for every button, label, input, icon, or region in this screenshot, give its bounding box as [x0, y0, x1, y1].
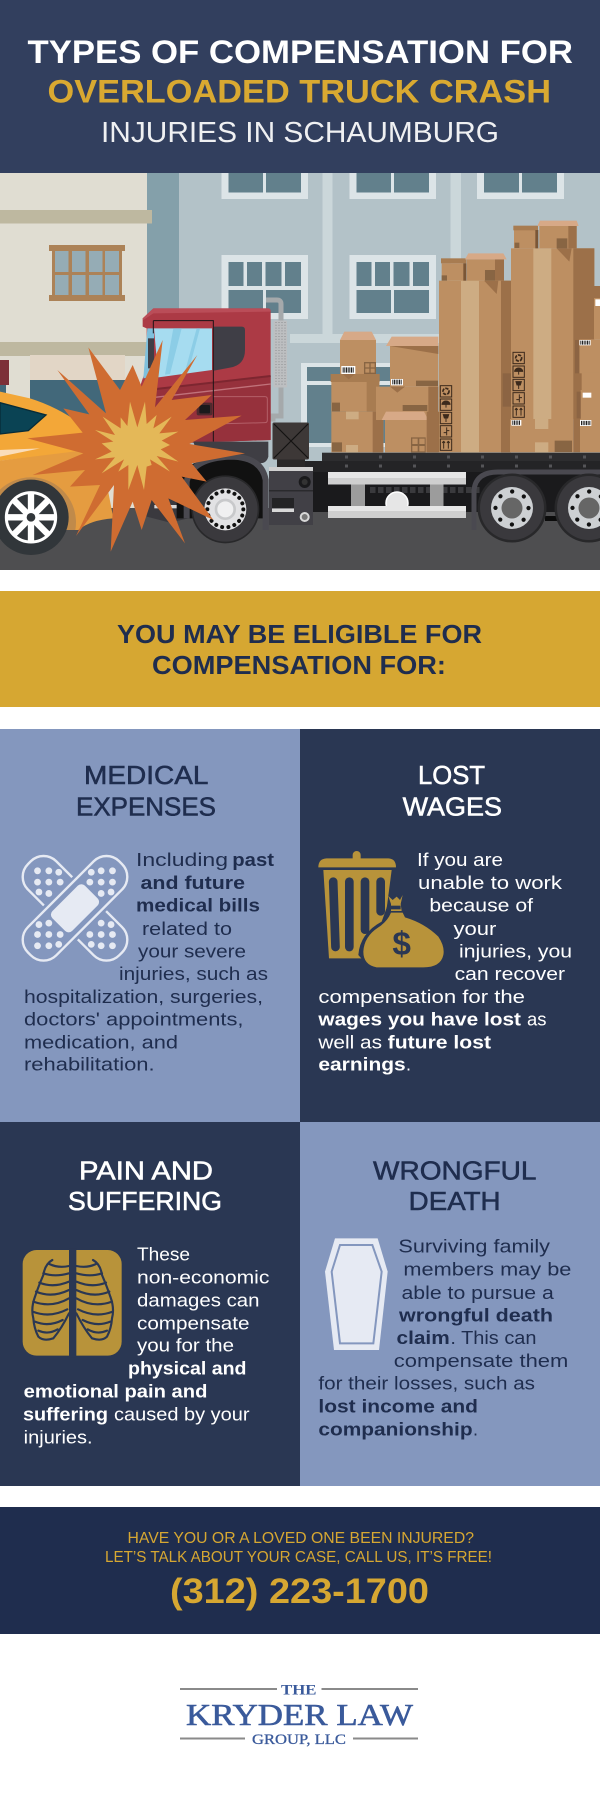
heading: pain and suffering: PAIN AND — [79, 1155, 213, 1185]
truck — [140, 300, 600, 543]
text: lost wages: wages you have lost — [317, 1010, 521, 1030]
background buildings — [147, 173, 600, 508]
text: wrongful death — [318, 1237, 571, 1439]
logo: The Kryder Law Group, LLC: THE — [281, 1682, 316, 1698]
icon: trash can and money bag — [318, 851, 445, 970]
text: lost wages: compensation for the — [318, 987, 525, 1007]
text: wrongful death: members may be — [403, 1260, 571, 1280]
logo: The Kryder Law Group, LLC: GROUP, LLC — [252, 1732, 346, 1748]
icon: crossed bandages — [15, 849, 135, 968]
right edge boxes — [575, 286, 600, 419]
heading: lost wages — [403, 760, 502, 822]
text: medical expenses: medical bills — [136, 896, 260, 916]
car and explosion — [0, 340, 245, 555]
panel: wrongful death — [300, 1122, 600, 1486]
text: medical expenses: past — [232, 850, 274, 870]
text: medical expenses: injuries, such as — [119, 964, 268, 984]
heading: wrongful death — [373, 1155, 536, 1216]
text: wrongful death: . — [473, 1419, 478, 1439]
logo: The Kryder Law Group, LLC — [180, 1682, 418, 1748]
cream building — [0, 173, 152, 513]
eligibility banner: YOU MAY BE ELIGIBLE FOR — [117, 619, 482, 649]
heading: wrongful death: WRONGFUL — [373, 1155, 536, 1185]
title — [28, 34, 573, 149]
crate — [272, 422, 309, 468]
icon: rib cage — [23, 1248, 122, 1357]
cab wheel — [147, 457, 266, 543]
text: wrongful death: for their losses, such as — [318, 1374, 535, 1394]
text: medical expenses: your severe — [138, 941, 246, 961]
text: lost wages: injuries, you — [459, 941, 572, 961]
text: medical expenses: rehabilitation. — [24, 1055, 155, 1075]
text: lost wages: because of — [429, 896, 534, 916]
heading: lost wages: LOST — [418, 760, 485, 790]
call to action: HAVE YOU OR A LOVED ONE BEEN INJURED? — [128, 1530, 474, 1547]
text: wrongful death: . This can — [450, 1328, 536, 1348]
title: TYPES OF COMPENSATION FOR — [28, 34, 573, 70]
flatbed and chassis — [295, 453, 600, 518]
title: OVERLOADED TRUCK CRASH — [48, 74, 551, 110]
text: wrongful death: compensate them — [394, 1351, 568, 1371]
text: pain and suffering: caused by your — [114, 1404, 250, 1424]
heading: medical expenses: EXPENSES — [76, 792, 216, 822]
text: pain and suffering: These — [137, 1245, 190, 1265]
heading: wrongful death: DEATH — [409, 1186, 501, 1216]
text: pain and suffering: physical and — [128, 1359, 246, 1379]
text: lost wages: If you are — [417, 850, 503, 870]
text: pain and suffering: compensate — [137, 1314, 250, 1334]
text: lost wages: as — [527, 1010, 546, 1030]
handling symbols, right column — [513, 352, 524, 417]
text: medical expenses: related to — [142, 919, 232, 939]
text: lost wages: your — [454, 919, 496, 939]
panel: pain and suffering — [0, 1122, 300, 1486]
rear wheels — [474, 472, 600, 542]
text: medical expenses: medication, and — [24, 1033, 178, 1053]
text: pain and suffering: damages can — [137, 1291, 260, 1311]
text: pain and suffering: emotional pain and — [24, 1381, 207, 1401]
cardboard box load — [331, 221, 600, 453]
yellow car — [0, 392, 113, 555]
panel: medical expenses — [0, 729, 300, 1122]
road — [0, 508, 600, 570]
text: medical expenses: and future — [140, 873, 245, 893]
illustration: overloaded truck crash — [0, 173, 600, 570]
logo: The Kryder Law Group, LLC: KRYDER LAW — [186, 1697, 414, 1732]
text: wrongful death: companionship — [318, 1419, 473, 1439]
text: medical expenses: doctors' appointments, — [24, 1010, 244, 1030]
text: medical expenses — [24, 850, 274, 1075]
handling symbols, left column — [440, 386, 452, 450]
battery box — [269, 467, 313, 525]
explosion — [27, 340, 245, 552]
call to action — [0, 1507, 600, 1634]
heading: lost wages: WAGES — [403, 792, 502, 822]
car wheel — [0, 480, 69, 555]
exhaust stack — [263, 300, 287, 419]
text: medical expenses: hospitalization, surgeries, — [24, 987, 263, 1007]
text: wrongful death: lost income and — [318, 1397, 478, 1417]
left stack of boxes — [331, 332, 439, 453]
text: pain and suffering: non-economic — [137, 1268, 269, 1288]
text: pain and suffering: you for the — [137, 1336, 234, 1356]
text: pain and suffering — [23, 1245, 269, 1447]
text: wrongful death: wrongful death — [398, 1306, 553, 1326]
text: lost wages: future lost — [388, 1033, 491, 1053]
eligibility banner: COMPENSATION FOR: — [152, 650, 446, 680]
heading: pain and suffering: SUFFERING — [68, 1186, 222, 1216]
text: lost wages: well as — [317, 1033, 382, 1053]
text: wrongful death: claim — [396, 1328, 450, 1348]
text: wrongful death: Surviving family — [398, 1237, 550, 1257]
text: lost wages: unable to work — [418, 873, 563, 893]
cab and front wheel — [140, 308, 271, 543]
heading: medical expenses — [76, 760, 216, 822]
panel: lost wages — [300, 729, 600, 1122]
tall box two — [510, 221, 600, 452]
truck cab — [140, 308, 271, 463]
call to action: LET’S TALK ABOUT YOUR CASE, CALL US, IT’S FREE! — [105, 1549, 492, 1566]
text: pain and suffering: injuries. — [24, 1427, 93, 1447]
heading: medical expenses: MEDICAL — [84, 760, 208, 790]
text: lost wages: earnings — [318, 1055, 406, 1075]
text: medical expenses: Including — [136, 850, 228, 870]
text: pain and suffering: suffering — [23, 1404, 108, 1424]
tall box one — [439, 253, 511, 452]
heading: pain and suffering — [68, 1155, 222, 1216]
icon: coffin — [325, 1238, 388, 1350]
text: wrongful death: able to pursue a — [402, 1283, 555, 1303]
eligibility banner — [0, 591, 600, 707]
header banner — [0, 0, 600, 173]
text: lost wages — [317, 850, 572, 1075]
text: lost wages: can recover — [455, 964, 565, 984]
title: INJURIES IN SCHAUMBURG — [101, 117, 499, 149]
text: lost wages: . — [406, 1055, 411, 1075]
phone number: (312) 223-1700 — [170, 1572, 429, 1611]
icon: trash can and money bag: $ — [392, 926, 411, 963]
